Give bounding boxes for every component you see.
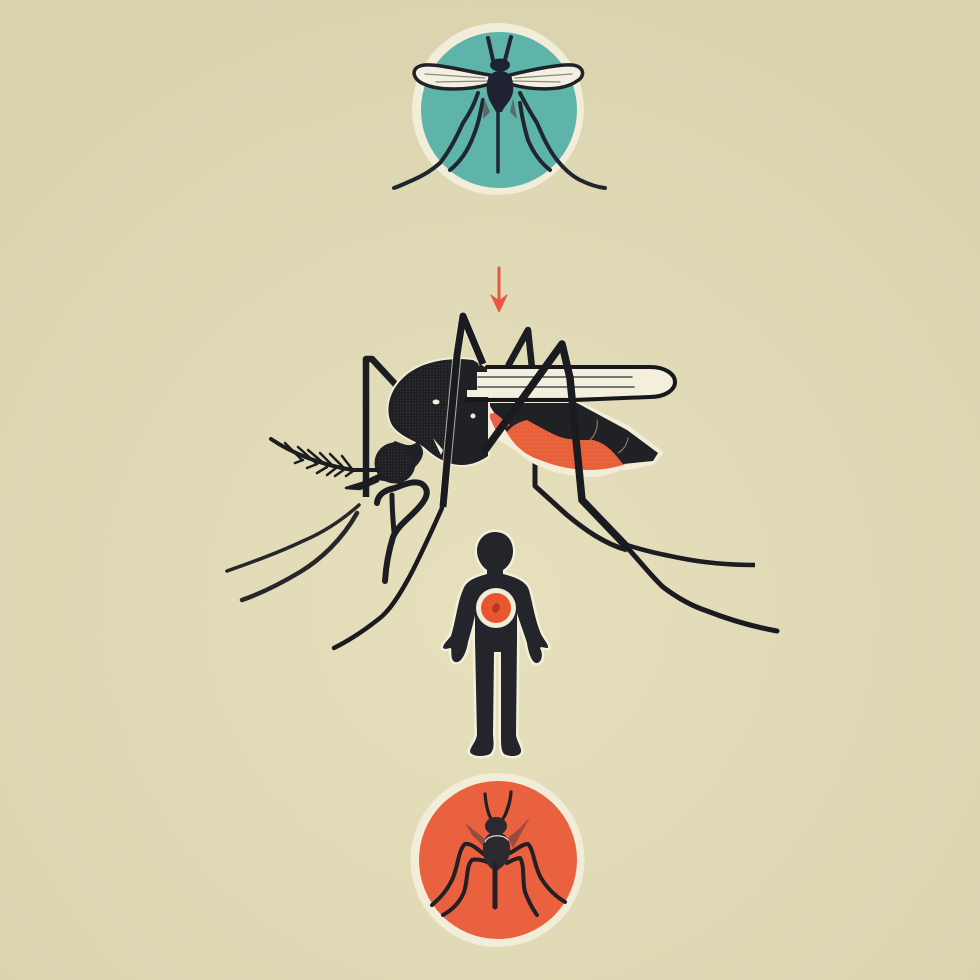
thorax: [388, 359, 490, 465]
mosquito body: [483, 37, 517, 172]
bug legs: [432, 844, 565, 915]
top badge: healthy mosquito on teal circle: [394, 23, 605, 195]
badge ring: [410, 773, 584, 947]
teal disc: [421, 32, 577, 188]
foreground leg one: [334, 316, 483, 648]
back legs behind body: [366, 330, 755, 565]
thorax speckle: [392, 362, 455, 455]
palp: [346, 475, 379, 489]
bug wings: [465, 817, 530, 848]
mosquito legs: [394, 93, 605, 188]
mosquito wings: [414, 65, 583, 89]
badge ring: [412, 23, 584, 195]
human figure with infected heart: [443, 532, 548, 756]
red disc: [419, 781, 577, 939]
bottom badge: infected mosquito on red circle: [410, 773, 584, 947]
main mosquito: [227, 316, 777, 648]
human silhouette: [443, 532, 548, 756]
lower front legs and tarsi: [227, 505, 359, 600]
bug body: [483, 792, 511, 907]
feathered antenna: [271, 439, 378, 476]
red downward arrow: [491, 268, 507, 312]
wing: [467, 367, 675, 400]
thorax spots: [432, 400, 476, 455]
heart circle: [476, 588, 516, 628]
abdomen: [487, 403, 660, 474]
foreground leg two: [483, 344, 777, 631]
head and neck: [374, 441, 423, 484]
curled middle leg: [377, 482, 427, 581]
